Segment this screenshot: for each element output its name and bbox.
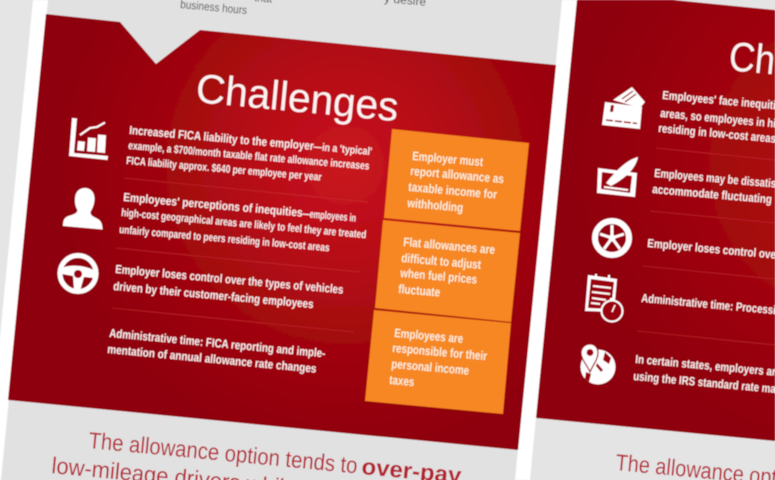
box: income taxes xyxy=(365,310,511,414)
icon: pen and check xyxy=(597,157,638,197)
text: perceptions of inequities: Employees' perceptions of inequities xyxy=(123,190,304,220)
text: administrative time xyxy=(107,326,326,376)
icon: clipboard and stopwatch xyxy=(585,274,622,322)
box: report allowance: report allowance as xyxy=(410,164,505,186)
text: loses control xyxy=(113,262,344,311)
heading: Challenges: Challenges xyxy=(194,65,401,130)
text: FICA liability: —in a 'typical' xyxy=(313,141,373,158)
box: flat allowances: fluctuate xyxy=(398,282,441,300)
box: income taxes: Employees are xyxy=(394,326,464,346)
box: flat allowances xyxy=(375,220,520,322)
text: administrative time: Administrative time: FICA reporting and imple- xyxy=(109,326,326,360)
text: perceptions of inequities: unfairly compared to peers residing in low-cost areas xyxy=(119,224,330,254)
icon: bar chart xyxy=(69,118,108,160)
box: report allowance: taxable income for xyxy=(408,180,498,202)
text: face inequities xyxy=(658,88,775,146)
text: FICA liability: Increased FICA liability to the employer xyxy=(129,123,315,153)
text: certain states xyxy=(633,352,775,396)
box: income taxes: personal income xyxy=(391,357,470,378)
panel: challenges right xyxy=(536,0,775,441)
icon: globe and pin xyxy=(580,344,616,384)
box: flat allowances: Flat allowances are xyxy=(403,235,496,257)
text: perceptions of inequities xyxy=(119,190,367,254)
box: report allowance: withholding xyxy=(406,196,464,215)
icon: person xyxy=(63,188,102,230)
text: loses control: Employer loses control over the types of vehicles xyxy=(115,262,344,297)
text: administrative time: mentation of annual allowance rate changes xyxy=(107,342,317,376)
text: may be dissatisfied xyxy=(652,166,775,206)
text: perceptions of inequities: —employees in xyxy=(302,208,357,225)
text: FICA liability: example, a $700/month taxable flat rate allowance increases xyxy=(128,140,370,173)
box: flat allowances: when fuel prices xyxy=(399,266,478,287)
text: FICA liability: FICA liability approx. $640 per employee per year xyxy=(126,155,323,184)
box: flat allowances: difficult to adjust xyxy=(401,251,482,272)
text: loses control: driven by their customer-facing employees xyxy=(113,279,314,311)
box: report allowance: Employer must xyxy=(412,149,484,169)
text: perceptions of inequities: high-cost geographical areas are likely to feel they are treated xyxy=(121,207,367,241)
icon: tire xyxy=(595,221,629,255)
icon: credit card xyxy=(602,87,645,129)
box: report allowance xyxy=(384,129,529,231)
box: income taxes: taxes xyxy=(389,373,415,389)
text: FICA liability xyxy=(126,123,373,184)
panel: challenges left xyxy=(8,14,556,450)
text: top fragment left xyxy=(180,0,427,17)
icon: steering wheel xyxy=(60,256,96,292)
box: income taxes: responsible for their xyxy=(392,341,488,363)
